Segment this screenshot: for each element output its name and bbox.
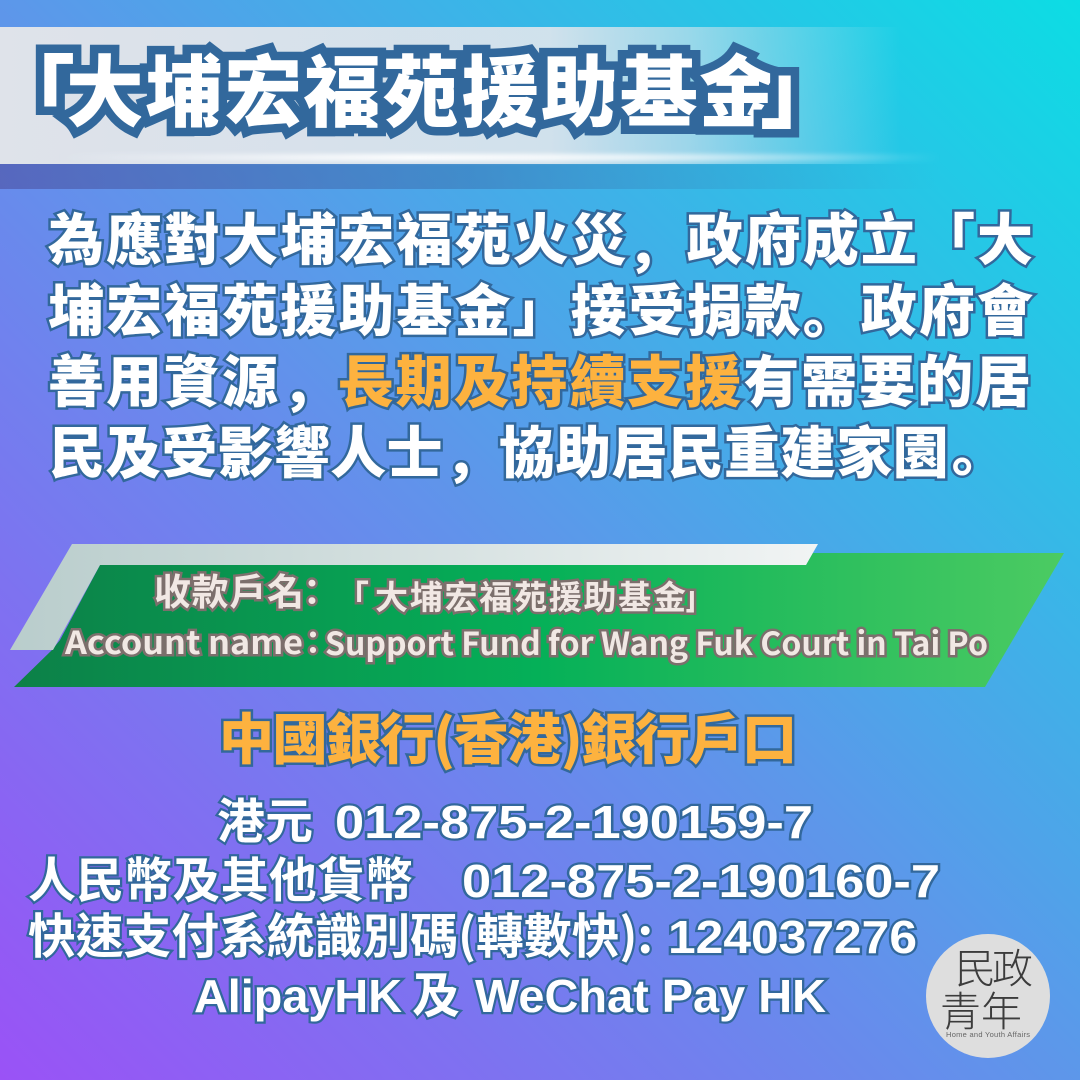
account name ribbon	[10, 544, 1064, 687]
bank account details: 012-875-2-190159-7	[335, 796, 813, 848]
intro paragraph: ，	[434, 429, 488, 508]
bank account details: 012-875-2-190160-7	[462, 855, 940, 907]
intro paragraph: 民及受影響人士 協助居民重建家園	[49, 409, 1005, 490]
intro paragraph: 埔宏福苑援助基金」接受捐款 政府會	[48, 267, 1033, 348]
intro paragraph: 為應對大埔宏福苑火災 政府成立「大	[48, 196, 1033, 277]
intro paragraph: 善用資源 長期及持續支援有需要的居	[48, 338, 1031, 419]
account name in Chinese: 「	[336, 571, 369, 619]
account name in English: Account name	[64, 618, 303, 664]
title: 」	[760, 25, 844, 146]
bank account details: 124037276	[668, 911, 917, 963]
account name in English: ：	[297, 618, 329, 664]
bank heading: 中國銀行(香港)銀行戶口	[219, 695, 797, 775]
logo: Home and Youth Affairs: 民政	[955, 935, 1033, 995]
account name in English: Support Fund for Wang Fuk Court in Tai Po	[325, 619, 988, 665]
bank account details: WeChat Pay HK	[475, 970, 826, 1022]
account name in Chinese: 收款戶名	[154, 562, 304, 616]
account name in Chinese: 大埔宏福苑援助基金	[375, 571, 686, 619]
intro paragraph: 。	[786, 286, 840, 365]
account name in Chinese: 」	[682, 571, 715, 619]
bank account details: 及	[412, 956, 460, 1026]
logo: Home and Youth Affairs: Home and Youth Affairs	[946, 1030, 1030, 1039]
bank account details: 快速支付系統識別碼(轉數快):	[28, 897, 653, 967]
bank account details: AlipayHK	[194, 970, 402, 1022]
intro paragraph	[48, 196, 1033, 508]
intro paragraph: ，	[616, 219, 670, 298]
intro paragraph: 。	[935, 424, 989, 503]
account name in Chinese	[154, 562, 715, 619]
bank account details: 人民幣及其他貨幣	[28, 841, 413, 911]
bank account details	[28, 782, 940, 1026]
title banner	[0, 27, 1000, 189]
logo: Home and Youth Affairs: 青年	[940, 978, 1022, 1038]
logo: Home and Youth Affairs	[926, 934, 1050, 1058]
intro paragraph: ，	[271, 358, 325, 437]
account name in Chinese: ：	[294, 564, 330, 616]
bank account details: 港元	[217, 782, 313, 852]
title: 大埔宏福苑援助基金	[66, 31, 777, 143]
